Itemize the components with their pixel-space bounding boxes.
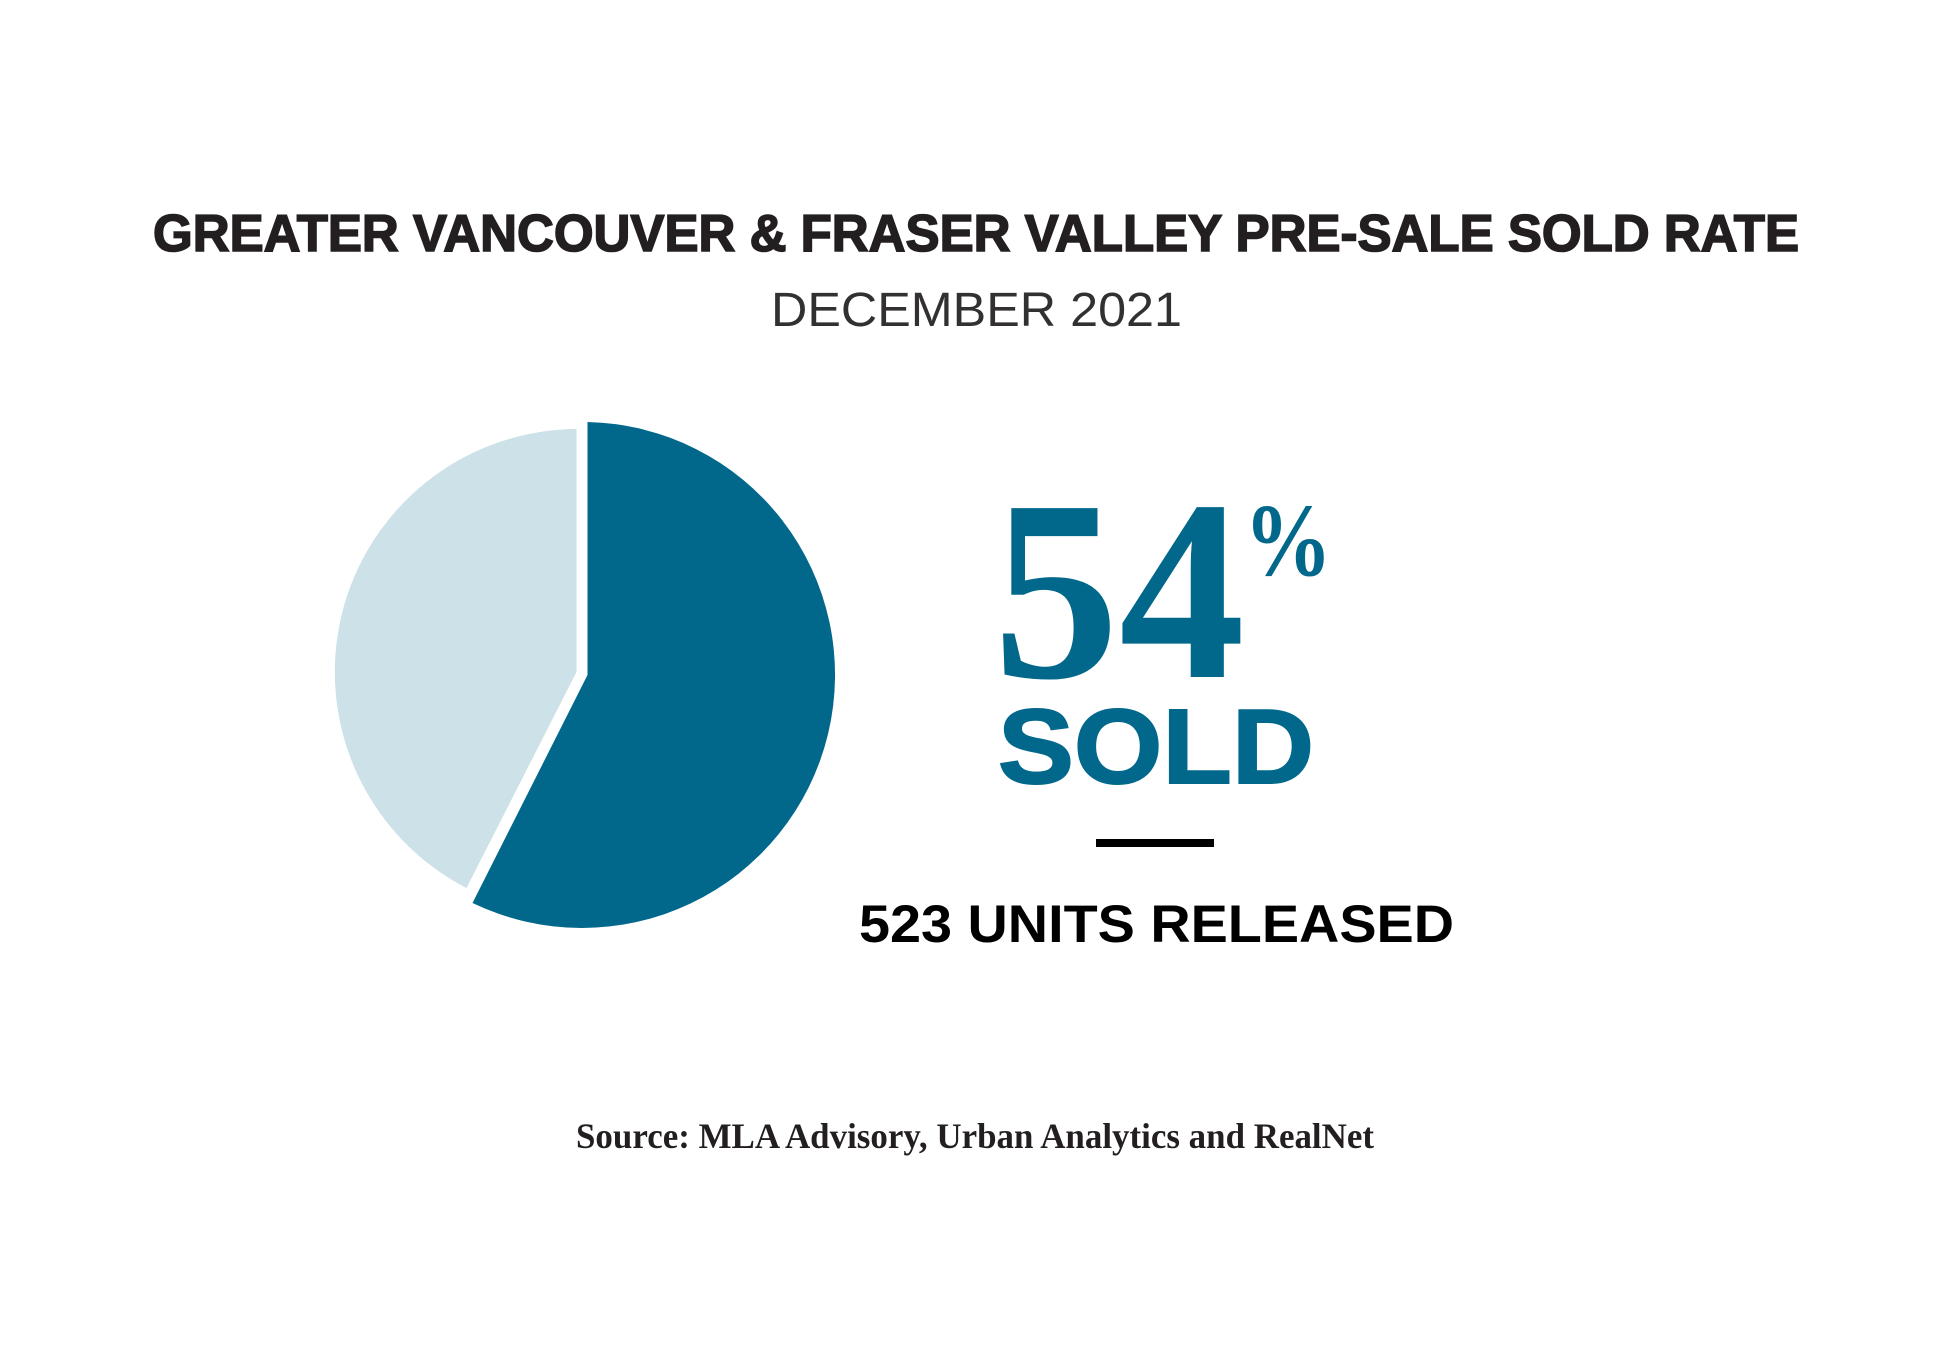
units released: 523 UNITS RELEASED [859,895,1454,954]
title: GREATER VANCOUVER & FRASER VALLEY PRE-SALE SOLD RATE [153,205,1799,263]
number 54: 54 [993,447,1245,733]
pie chart [335,422,835,928]
source note: Source: MLA Advisory, Urban Analytics and RealNet [576,1116,1374,1156]
pie slice: sold 54% [472,422,835,928]
pie slice: unsold [335,429,576,888]
divider rule [1096,839,1214,847]
label: sold: SOLD [998,688,1314,806]
big stat: 54% [993,447,1332,733]
percent sign: % [1244,483,1332,598]
subtitle: date: DECEMBER 2021 [771,284,1182,337]
